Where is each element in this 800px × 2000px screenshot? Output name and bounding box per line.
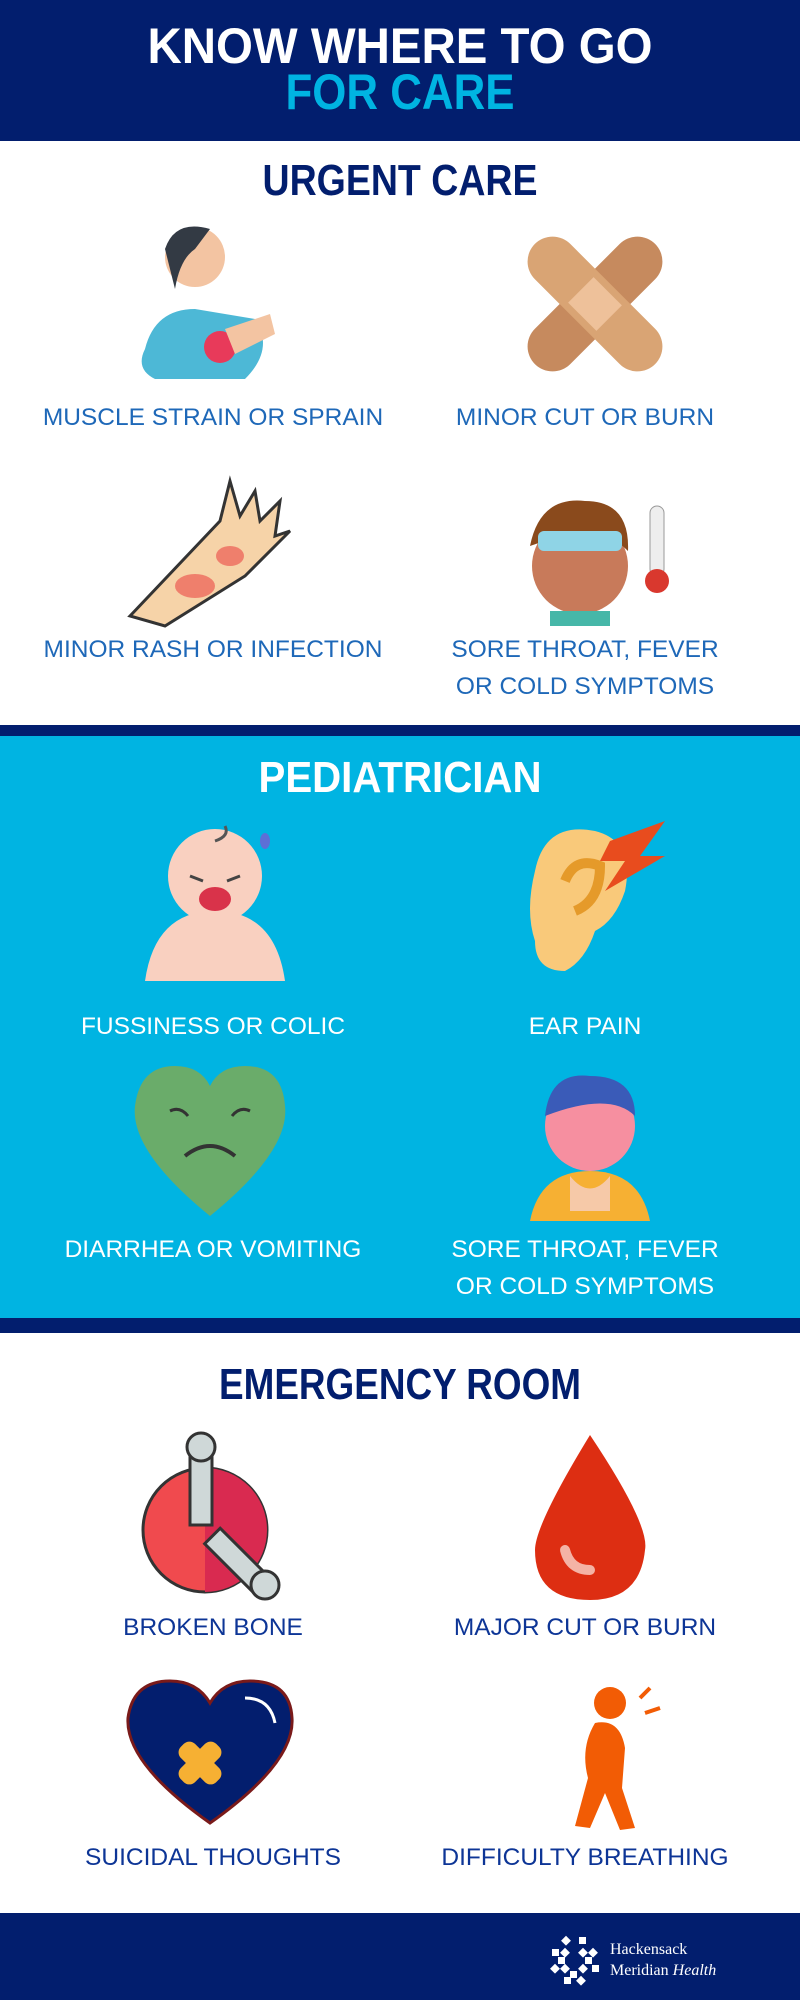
label: muscle strain or sprain: MUSCLE STRAIN OR SPRAIN <box>43 404 383 431</box>
icon: ear pain <box>530 821 665 971</box>
logo text <box>610 1941 716 1979</box>
divider stripe <box>0 1318 800 1333</box>
panel: pediatrician <box>0 736 800 1318</box>
label: diarrhea or vomiting: DIARRHEA OR VOMITING <box>65 1236 361 1263</box>
icon: rash arm <box>127 475 291 628</box>
label: minor rash or infection: MINOR RASH OR INFECTION <box>44 636 382 663</box>
icon: fever child <box>530 500 669 626</box>
icon: sore throat child <box>530 1076 650 1221</box>
label: sore throat fever (urgent): SORE THROAT, FEVER <box>451 636 719 663</box>
heading: pediatrician: PEDIATRICIAN <box>258 753 542 802</box>
label: sore throat fever (urgent) <box>451 636 719 700</box>
panel: urgent care <box>43 156 719 700</box>
title <box>148 18 652 120</box>
icon: nauseous heart <box>134 1066 286 1216</box>
icon: blood drop <box>535 1435 646 1600</box>
logo <box>550 1936 716 1986</box>
label: minor cut or burn: MINOR CUT OR BURN <box>456 404 714 431</box>
icon: muscle strain <box>142 226 275 379</box>
logo text: Hackensack <box>610 1941 687 1958</box>
icon: broken bone <box>142 1432 280 1600</box>
label: sore throat fever (pediatric): OR COLD SYMPTOMS <box>456 1273 714 1300</box>
title: KNOW WHERE TO GO <box>148 18 652 74</box>
label: broken bone: BROKEN BONE <box>123 1614 303 1641</box>
label: fussiness or colic: FUSSINESS OR COLIC <box>81 1013 345 1040</box>
logo text: Meridian Health <box>610 1962 716 1979</box>
heading: emergency room: EMERGENCY ROOM <box>219 1360 581 1409</box>
title: FOR CARE <box>286 64 514 120</box>
icon: logo mark <box>550 1936 599 1986</box>
heading: urgent care: URGENT CARE <box>262 156 538 205</box>
icon: bandage <box>528 236 662 372</box>
label: sore throat fever (pediatric) <box>451 1236 719 1300</box>
label: sore throat fever (urgent): OR COLD SYMPTOMS <box>456 673 714 700</box>
header banner <box>0 0 800 141</box>
panel: emergency room <box>85 1360 729 1871</box>
divider stripe <box>0 725 800 736</box>
label: major cut or burn: MAJOR CUT OR BURN <box>454 1614 716 1641</box>
icon: crying baby <box>145 825 285 981</box>
label: difficulty breathing: DIFFICULTY BREATHING <box>441 1844 729 1871</box>
label: sore throat fever (pediatric): SORE THROAT, FEVER <box>451 1236 719 1263</box>
label: suicidal thoughts: SUICIDAL THOUGHTS <box>85 1844 341 1871</box>
label: ear pain: EAR PAIN <box>529 1013 641 1040</box>
icon: person difficulty breathing <box>575 1686 661 1830</box>
icon: heart with bandage <box>126 1680 294 1825</box>
footer <box>0 1913 800 2000</box>
